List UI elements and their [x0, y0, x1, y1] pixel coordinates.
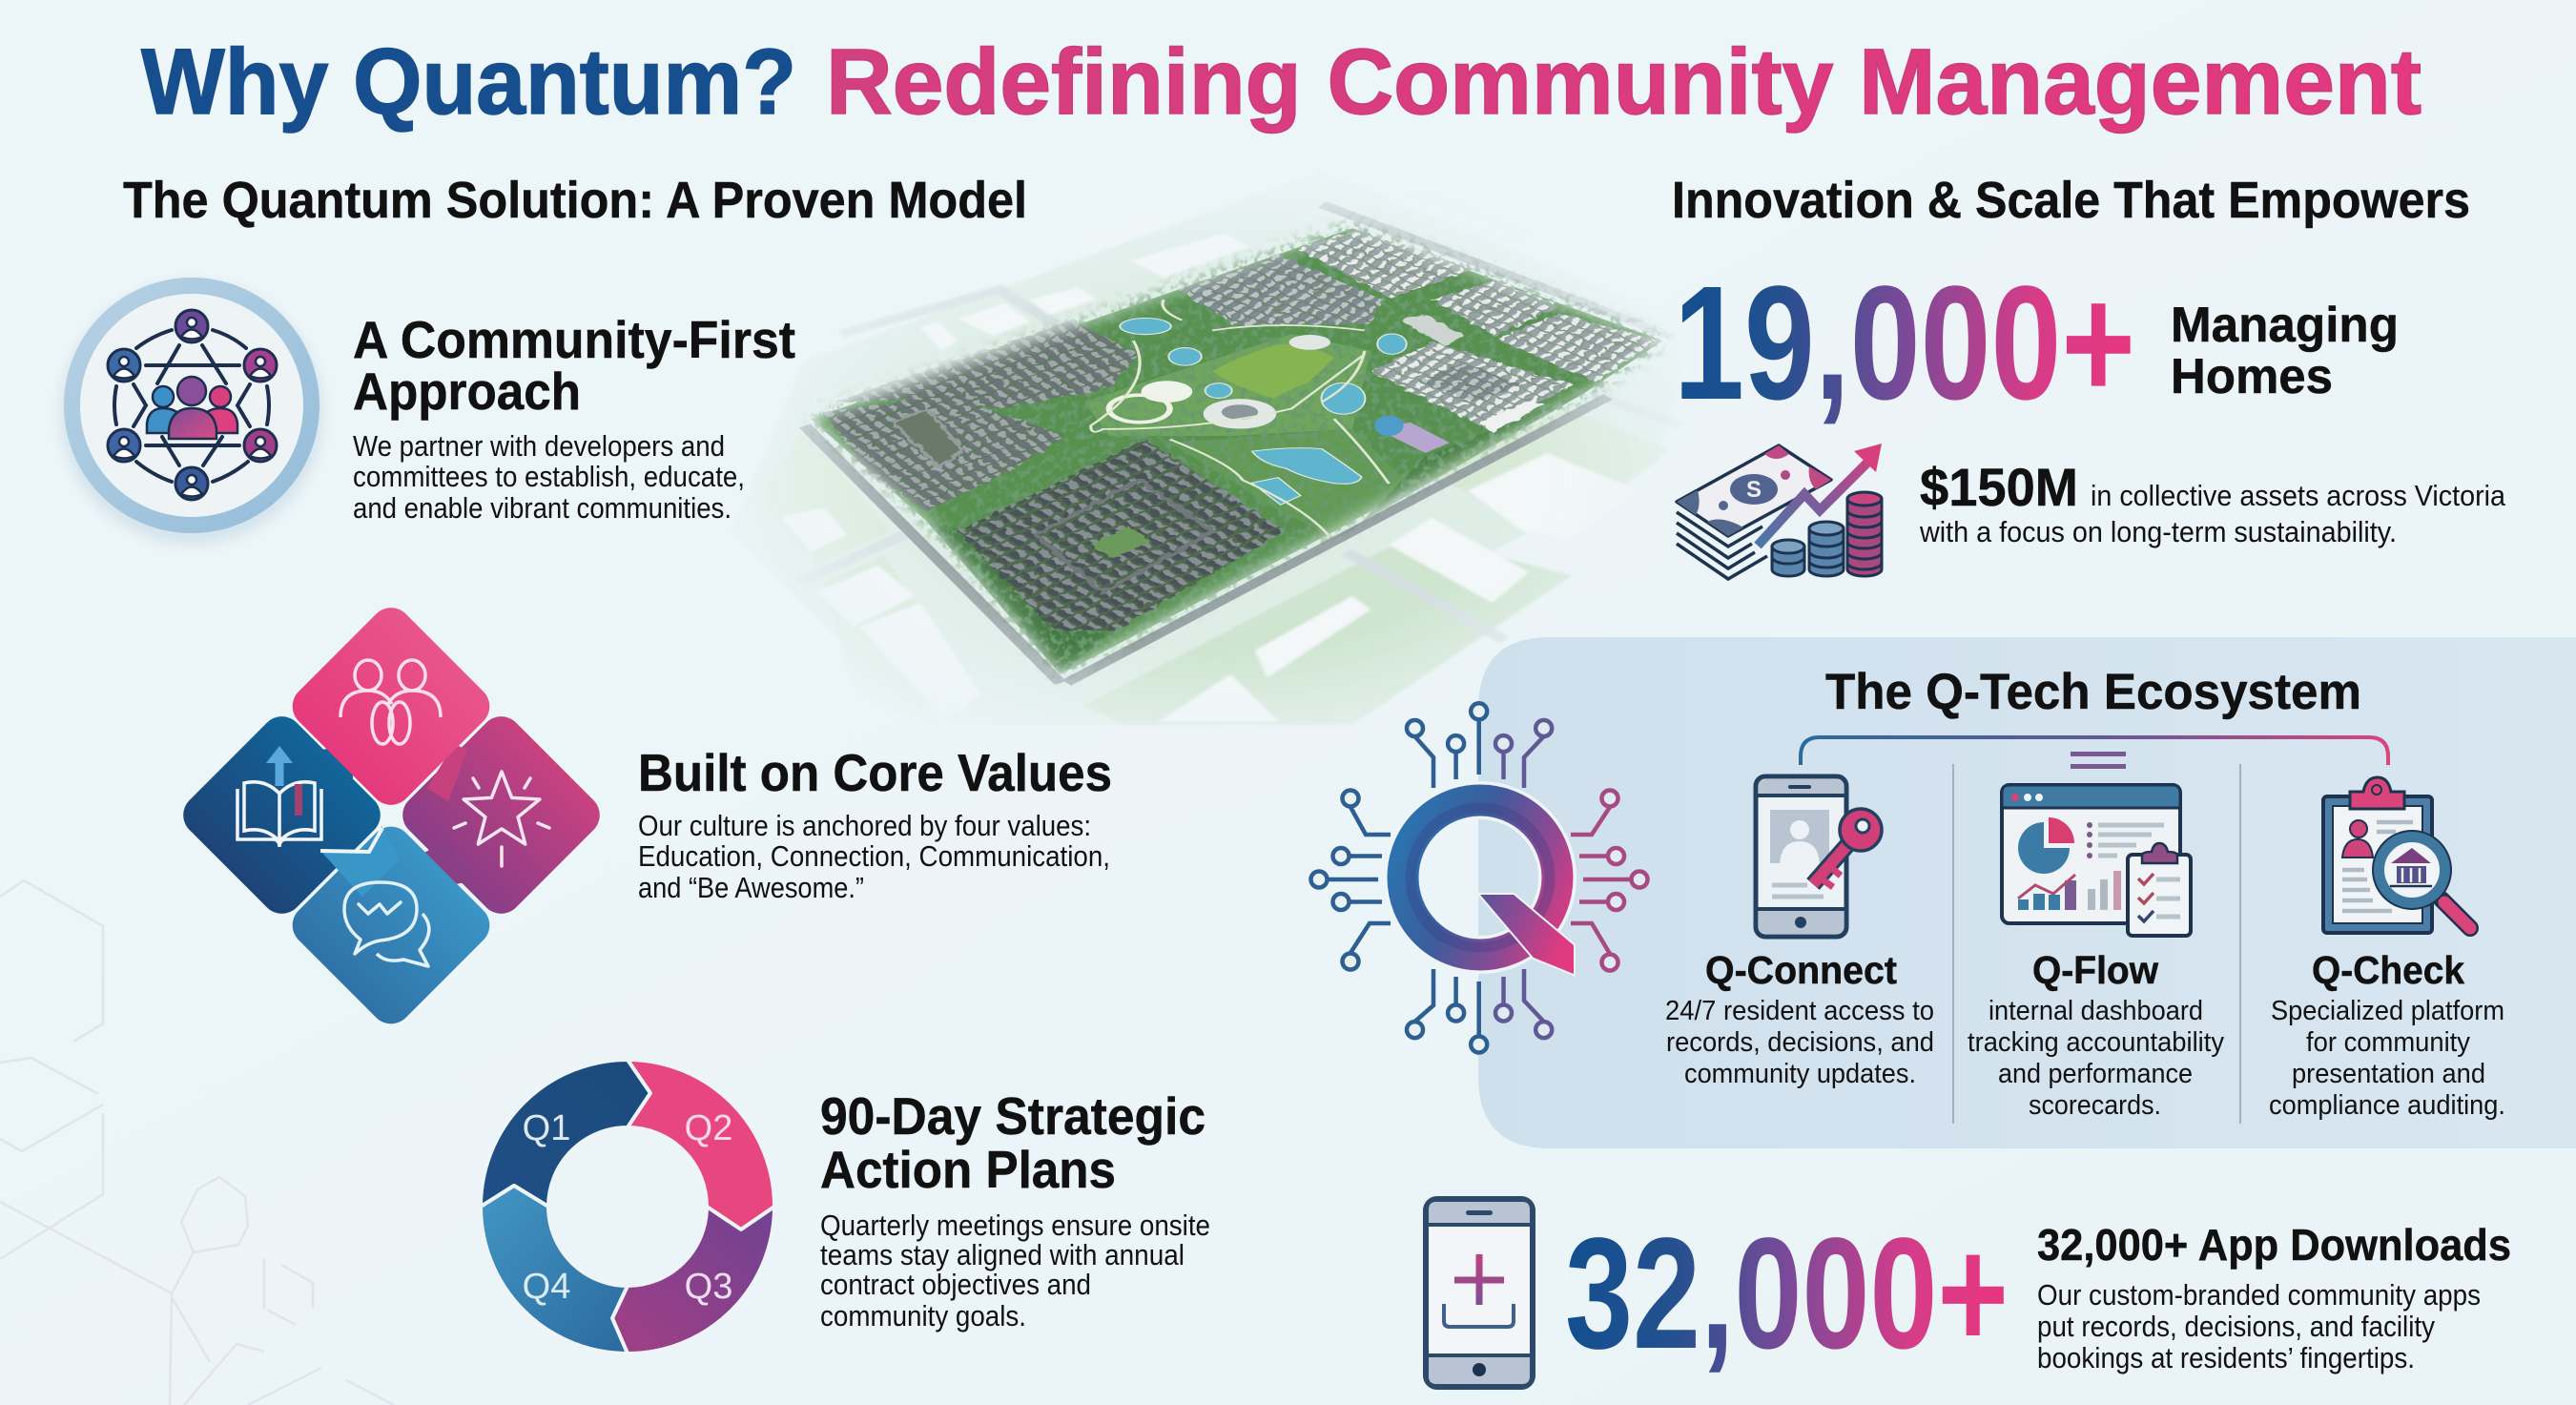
aerial: ponds and lakes — [1120, 319, 1407, 505]
heading: 90-day strategic action plans: 90-Day Strategic — [820, 1086, 1206, 1146]
heading: built on core values: Built on Core Values — [638, 743, 1112, 802]
text block: strategic action plans — [820, 1086, 1210, 1333]
segment: q2: Q2 — [685, 1108, 732, 1148]
title — [141, 30, 2421, 134]
icon: phone with download — [1426, 1199, 1533, 1387]
growth arrow — [1758, 444, 1882, 546]
panel: q-tech ecosystem — [1478, 637, 2576, 1148]
text: $150m collective assets: in collective assets across Victoria — [2091, 479, 2506, 512]
description: q-check: Specialized platform — [2271, 996, 2504, 1026]
stat label: managing homes: Managing — [2171, 298, 2399, 353]
icon: phone with key — [1756, 776, 1882, 937]
stat label: managing homes — [2171, 298, 2399, 404]
banknote stack: S — [1746, 477, 1762, 503]
body: app downloads — [2037, 1278, 2481, 1374]
aerial: housing blocks — [823, 230, 1659, 630]
key — [1813, 809, 1882, 887]
network nodes — [108, 310, 277, 500]
diamond: education — [175, 708, 389, 922]
body: core values: Education, Connection, Communication, — [638, 839, 1110, 873]
name: q-connect: Q-Connect — [1705, 948, 1897, 992]
description: q-check — [2269, 996, 2505, 1121]
name: q-check: Q-Check — [2312, 948, 2464, 992]
description: q-check: presentation and — [2292, 1059, 2485, 1089]
description: q-flow — [1968, 996, 2224, 1121]
body: app downloads: bookings at residents’ fingertips. — [2037, 1341, 2415, 1374]
segment: q1: Q1 — [523, 1108, 570, 1148]
aerial: community buildings — [1142, 381, 1192, 403]
segment: q1 — [481, 1060, 650, 1207]
bracket connector — [1801, 737, 2388, 765]
diamond: be awesome star — [394, 708, 608, 922]
body: action plans: contract objectives and — [820, 1268, 1091, 1301]
description: q-connect — [1665, 996, 1934, 1089]
legend list — [2087, 822, 2164, 858]
segment: q3 — [612, 1207, 774, 1353]
heading: a community-first approach — [353, 310, 795, 421]
body: community-first: committees to establish, educate, — [353, 460, 745, 493]
text block: app downloads — [2037, 1220, 2511, 1374]
heading: the q-tech ecosystem: The Q-Tech Ecosystem — [1825, 664, 2361, 720]
icon: clipboard with magnifier — [2323, 777, 2470, 933]
pie chart — [2018, 817, 2074, 874]
icon: community network badge — [60, 278, 323, 545]
description: q-check: for community — [2306, 1027, 2470, 1058]
chart: quarterly cycle ring — [481, 1060, 774, 1353]
description: q-flow: scorecards. — [2029, 1090, 2161, 1121]
description: q-flow: internal dashboard — [1989, 996, 2203, 1026]
small bars icon — [2071, 752, 2126, 769]
text: $150m collective assets — [1919, 457, 2506, 548]
body: action plans: community goals. — [820, 1299, 1026, 1333]
description: q-flow: tracking accountability — [1968, 1027, 2224, 1058]
stat number: 32,000+: 32,000+ — [1565, 1206, 2009, 1382]
title: redefining community management: Redefining Community Management — [826, 30, 2421, 134]
aerial: central lawn — [1212, 344, 1334, 399]
stat: 19,000+ managing homes — [1674, 253, 2399, 434]
body: core values: Our culture is anchored by four values: — [638, 809, 1091, 842]
stat label: managing homes: Homes — [2171, 349, 2333, 404]
name: q-flow: Q-Flow — [2032, 948, 2158, 992]
banknote stack — [1677, 445, 1831, 579]
column: q-connect — [1665, 776, 1934, 1089]
title: why quantum: Why Quantum? — [141, 30, 796, 134]
text block: core values — [638, 743, 1112, 904]
heading: 90-day strategic action plans — [820, 1086, 1206, 1199]
aerial: faded surrounding blocks and roads — [759, 201, 1666, 725]
central people group — [147, 377, 237, 439]
text: $150m collective assets: $150M — [1920, 457, 2078, 517]
aerial: main green parcel — [792, 210, 1679, 687]
body: community-first — [353, 429, 745, 525]
text block: community-first approach — [353, 310, 795, 525]
magnifier — [2373, 831, 2470, 928]
circuit traces — [1310, 703, 1648, 1053]
icon: four core values diamonds — [175, 599, 608, 1032]
column: q-check — [2269, 777, 2505, 1121]
bar and line charts — [2018, 871, 2121, 910]
q letterform ring and tail — [1403, 800, 1574, 974]
body: core values — [638, 809, 1110, 904]
description: q-connect: 24/7 resident access to — [1665, 996, 1934, 1026]
diamond: connection — [284, 599, 498, 814]
description: q-flow: and performance — [1998, 1059, 2193, 1089]
icon: money stack with growth arrow and coins — [1677, 444, 1882, 579]
body: core values: and “Be Awesome.” — [638, 871, 864, 904]
section heading: innovation and scale: Innovation & Scale That Empowers — [1672, 172, 2470, 229]
segment: q2 — [628, 1060, 774, 1229]
aerial illustration of master-planned community — [759, 201, 1672, 725]
heading: 32,000+ app downloads: 32,000+ App Downloads — [2037, 1220, 2511, 1270]
segment: q4 — [481, 1186, 628, 1353]
aerial: park paths — [1091, 300, 1389, 535]
description: q-connect: records, decisions, and — [1666, 1027, 1934, 1058]
description: q-check: compliance auditing. — [2269, 1090, 2505, 1121]
coin stacks — [1772, 492, 1882, 576]
heading: a community-first approach: Approach — [353, 362, 581, 421]
checklist clipboard — [2128, 843, 2191, 936]
diamond: communication — [284, 818, 498, 1032]
faint hexagon background pattern — [0, 880, 394, 1405]
aerial: sports court — [1391, 422, 1450, 453]
description: q-connect: community updates. — [1684, 1059, 1916, 1089]
body: action plans: Quarterly meetings ensure onsite — [820, 1209, 1210, 1242]
heading: 90-day strategic action plans: Action Plans — [820, 1140, 1116, 1199]
icon: dashboard with clipboard — [2002, 785, 2191, 936]
stat number: 19,000+: 19,000+ — [1674, 253, 2135, 434]
body: app downloads: Our custom-branded community apps — [2037, 1278, 2481, 1312]
icon: q logo with circuit traces — [1310, 703, 1648, 1053]
body: action plans — [820, 1209, 1210, 1333]
body: action plans: teams stay aligned with annual — [820, 1238, 1185, 1271]
text: $150m collective assets: with a focus on long-term sustainability. — [1919, 515, 2397, 548]
segment: q3: Q3 — [685, 1267, 732, 1307]
heading: a community-first approach: A Community-First — [353, 310, 795, 369]
body: app downloads: put records, decisions, and facility — [2037, 1310, 2435, 1343]
body: community-first: and enable vibrant communities. — [353, 491, 732, 525]
download plus symbol — [1454, 1254, 1504, 1305]
segment: q4: Q4 — [523, 1267, 570, 1307]
section heading: the quantum solution: The Quantum Solution: A Proven Model — [123, 172, 1027, 229]
column: q-flow — [1968, 785, 2224, 1121]
body: community-first: We partner with developers and — [353, 429, 725, 463]
